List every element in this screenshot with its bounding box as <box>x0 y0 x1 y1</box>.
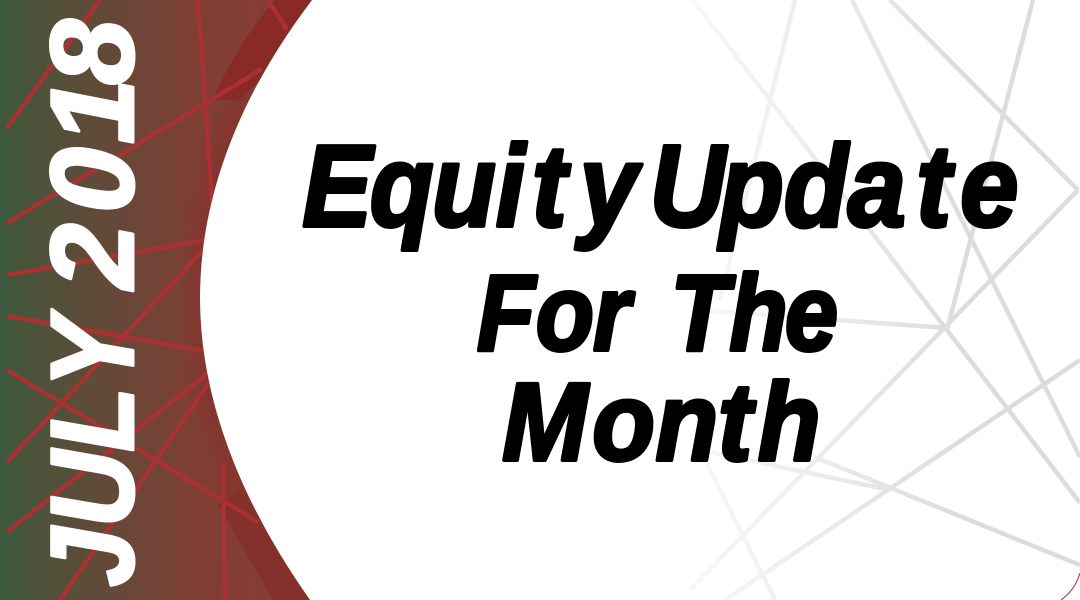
title line 2: For The <box>477 252 838 373</box>
title line 1: Equity <box>302 122 642 251</box>
date label: JULY 2018 <box>26 19 159 587</box>
decoration: small red arc bottom right <box>1061 573 1080 600</box>
title <box>302 122 1018 484</box>
dark edge: top <box>212 0 320 100</box>
dark edge: bottom <box>218 493 310 600</box>
title line 3: Month <box>502 361 820 484</box>
panel: curved gradient side band <box>0 0 320 600</box>
title line 1 <box>302 122 1018 251</box>
title line 1: Update <box>650 122 1018 251</box>
date label: JULY 2018: JULY <box>26 308 158 587</box>
dark edge: middle <box>196 108 260 520</box>
decoration: grey line network <box>690 0 1080 600</box>
decoration: red line network <box>7 0 287 600</box>
date label: JULY 2018: 2018 <box>27 19 159 291</box>
